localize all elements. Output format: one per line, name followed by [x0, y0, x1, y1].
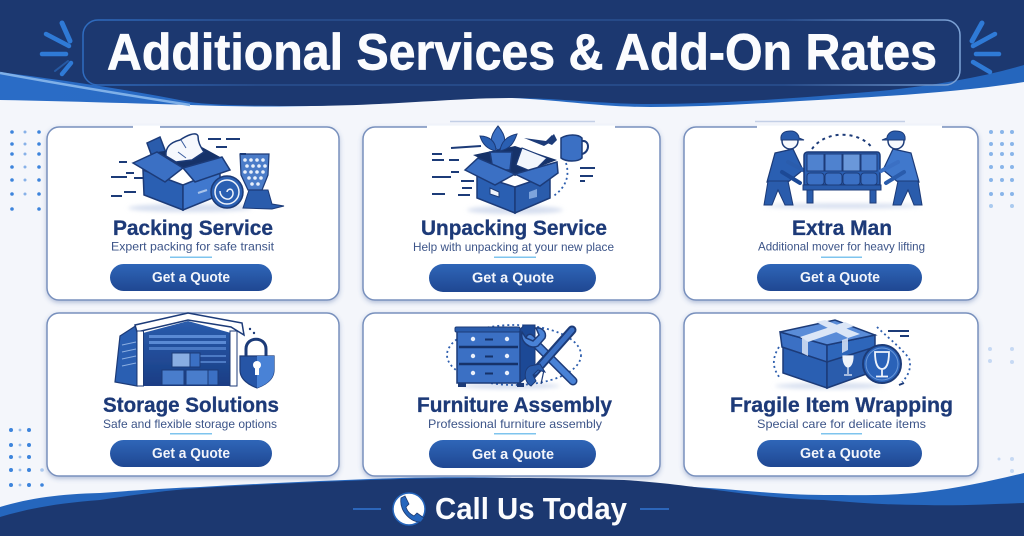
title pill outline	[83, 20, 960, 85]
panel: storage solutions	[47, 313, 339, 476]
footer call to action	[353, 491, 669, 526]
header banner	[0, 0, 1024, 107]
icon: storage unit with padlock	[115, 313, 274, 388]
icon: dresser with wrench and screwdriver	[447, 325, 581, 389]
button: Get a Quote	[800, 446, 881, 462]
heading: Storage Solutions	[103, 394, 279, 417]
panel: fragile item wrapping	[684, 313, 978, 476]
icon: open box with packing supplies	[111, 134, 284, 212]
button	[757, 440, 922, 467]
footer call to action: Call Us Today	[435, 491, 628, 526]
description: Expert packing for safe transit	[111, 240, 275, 254]
description: Safe and flexible storage options	[103, 417, 277, 431]
footer banner	[0, 473, 1024, 536]
button	[757, 264, 922, 291]
button	[110, 440, 272, 467]
title: Additional Services & Add-On Rates	[107, 24, 937, 80]
button: Get a Quote	[472, 447, 554, 463]
description: Help with unpacking at your new place	[413, 240, 614, 254]
panel: unpacking service	[363, 122, 660, 300]
icon: phone	[393, 493, 425, 525]
heading: Furniture Assembly	[417, 394, 612, 417]
heading: Extra Man	[792, 217, 892, 240]
panel: furniture assembly	[363, 313, 660, 476]
description: Professional furniture assembly	[428, 417, 602, 431]
dots: upper left	[10, 130, 41, 211]
dots: upper right	[989, 130, 1014, 208]
button	[429, 440, 596, 468]
heading: Unpacking Service	[421, 217, 607, 240]
panel: packing service	[47, 127, 339, 300]
button: Get a Quote	[152, 270, 230, 286]
button	[110, 264, 272, 291]
heading: Fragile Item Wrapping	[730, 394, 953, 417]
panel: extra man	[684, 122, 978, 300]
description: Special care for delicate items	[757, 417, 926, 431]
description: Additional mover for heavy lifting	[758, 240, 925, 254]
icon: right burst	[972, 23, 999, 72]
button: Get a Quote	[152, 446, 230, 462]
button: Get a Quote	[800, 270, 880, 286]
icon: open box with plant and mug	[432, 126, 595, 214]
icon: two movers carrying a sofa	[764, 131, 922, 208]
icon: fragile box with wine glass badge	[774, 320, 910, 389]
button	[429, 264, 596, 292]
dots: lower right	[988, 347, 1014, 473]
button: Get a Quote	[472, 270, 554, 286]
heading: Packing Service	[113, 217, 273, 240]
dots: lower left	[9, 428, 44, 487]
icon: left burst	[42, 23, 71, 74]
